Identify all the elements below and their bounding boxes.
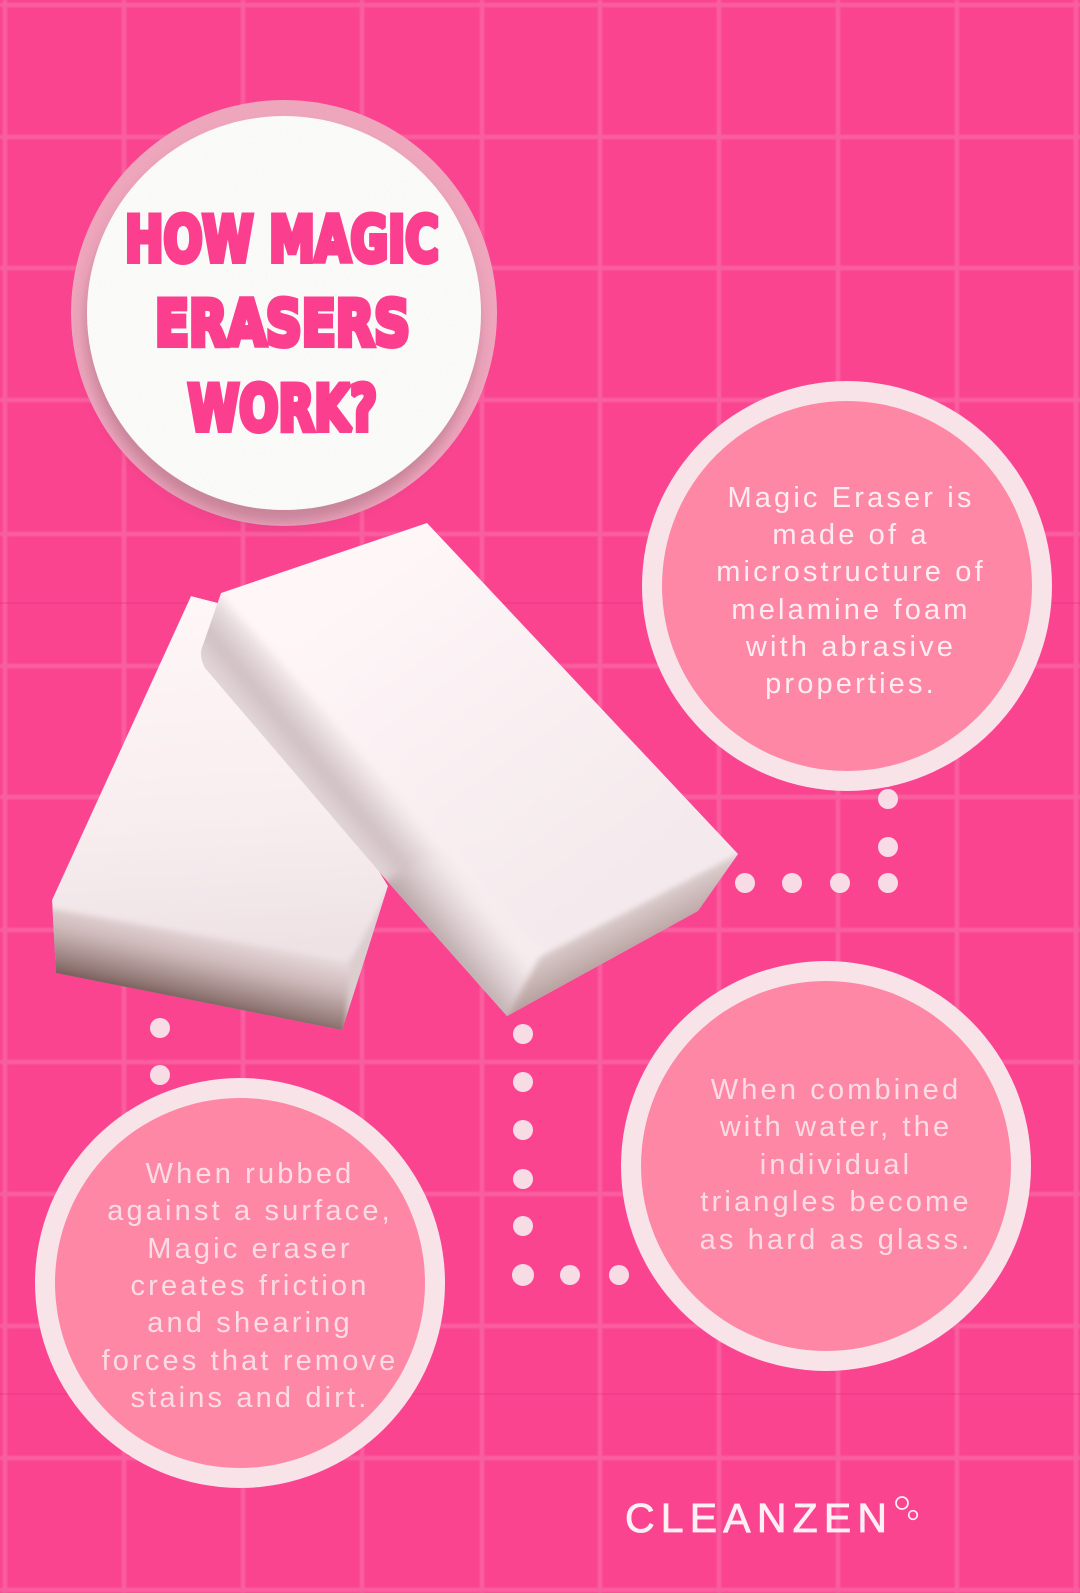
text: friction description: and shearing [147,1307,353,1339]
illustration: two white melamine erasers [52,523,738,1030]
text: water description: When combined [711,1074,961,1106]
text: foam description: Magic Eraser is [727,482,975,514]
dotted connector: foam circle to eraser [735,789,898,893]
text: water description: as hard as glass. [700,1224,972,1256]
text: foam description: made of a [772,519,930,551]
title: How Magic Erasers Work?: WORK? [188,372,377,445]
logo: CLEANZEN: CLEANZEN [625,1495,887,1541]
left eraser [52,596,388,1030]
panel: title circle [71,100,497,526]
panel: magic eraser is made of melamine foam [642,381,1052,791]
right eraser [180,520,745,1030]
dotted connector: eraser to water circle [512,1024,629,1286]
text: friction description: forces that remove [102,1345,398,1377]
icon: bubbles [896,1497,917,1519]
text: water description [700,1074,972,1256]
panel: rubbing creates friction [35,1078,445,1488]
text: foam description: properties. [765,668,937,700]
dotted connector: eraser to friction circle [150,1018,170,1085]
text: foam description [716,482,986,700]
text: friction description: Magic eraser [147,1233,353,1265]
text: friction description: against a surface, [107,1195,393,1227]
text: friction description [102,1158,398,1414]
text: water description: triangles become [700,1186,972,1218]
text: friction description: creates friction [131,1270,369,1302]
text: friction description: When rubbed [146,1158,354,1190]
title: How Magic Erasers Work?: HOW MAGIC [125,203,439,276]
white paper disc [87,116,481,510]
text: foam description: melamine foam [731,594,971,626]
text: foam description: with abrasive [745,631,956,663]
text: friction description: stains and dirt. [130,1382,370,1414]
text: foam description: microstructure of [716,556,986,588]
panel: combined with water [621,961,1031,1371]
title: How Magic Erasers Work?: ERASERS [155,287,410,360]
text: water description: with water, the [719,1111,952,1143]
text: water description: individual [760,1149,912,1181]
title: How Magic Erasers Work? [125,203,439,445]
